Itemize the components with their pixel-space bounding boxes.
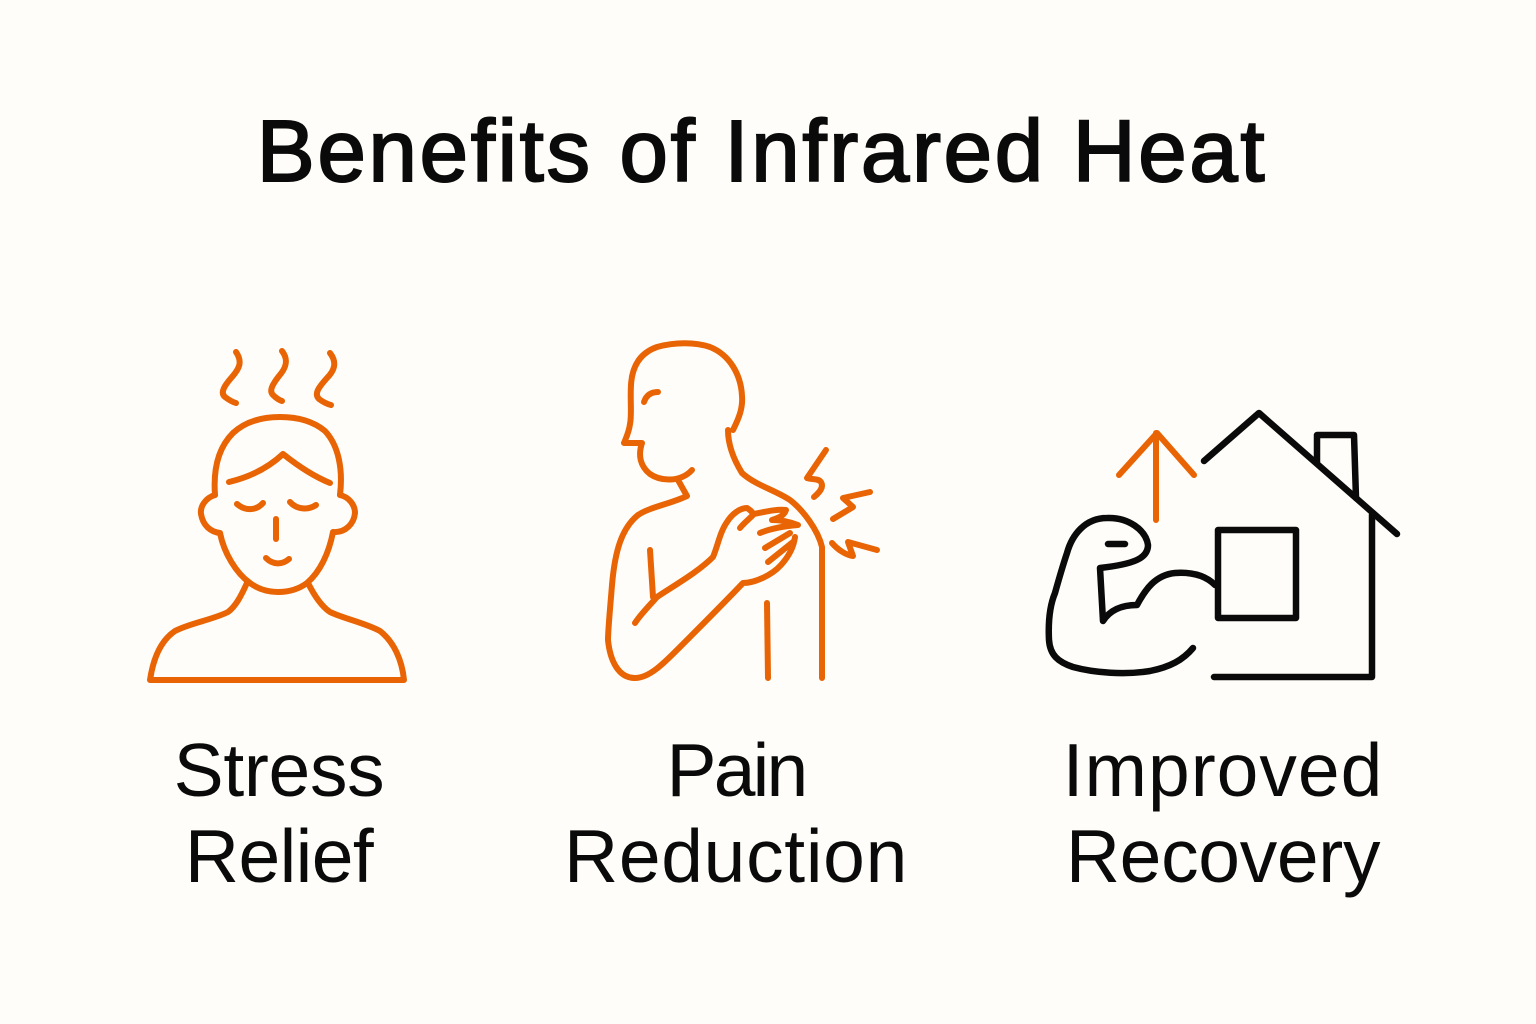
icon: house and muscle arm (1049, 413, 1397, 677)
label: improved recovery (1063, 728, 1383, 898)
label: improved recovery: Recovery (1066, 814, 1380, 898)
label: stress relief (174, 728, 384, 898)
icon: stress relief head (150, 351, 404, 680)
icon: upward arrow (1119, 433, 1194, 520)
label: stress relief: Stress (174, 728, 384, 812)
label: pain reduction (564, 728, 908, 898)
title: Benefits of Infrared Heat (257, 103, 1267, 200)
label: improved recovery: Improved (1063, 728, 1383, 812)
icon: shoulder pain figure (608, 343, 877, 678)
label: stress relief: Relief (185, 814, 373, 898)
label: pain reduction: Reduction (564, 814, 908, 898)
label: pain reduction: Pain (667, 728, 805, 812)
